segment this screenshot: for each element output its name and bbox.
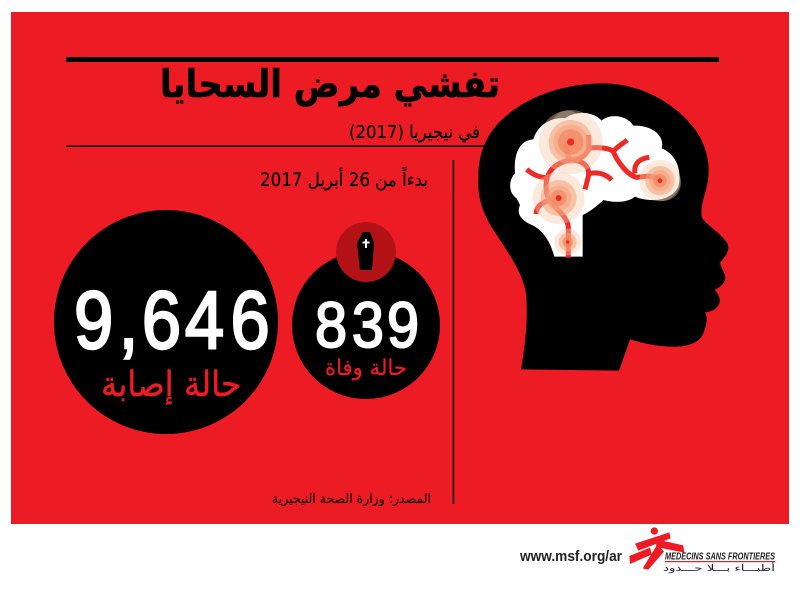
cases label: حالة إصابة: [101, 365, 241, 405]
header divider: [66, 146, 496, 147]
inflammation spot: top: [539, 110, 603, 174]
deaths number: 839: [315, 289, 419, 361]
deaths label: حالة وفاة: [325, 356, 407, 381]
icon: coffin badge: [336, 222, 396, 282]
footer website: www.msf.org/ar: [519, 549, 622, 565]
date line: بدءاً من 26 أبريل 2017: [260, 166, 428, 191]
logo arabic name: أطبـــاء بـــلا حـــدود: [663, 562, 775, 574]
cases number: 9,646: [74, 275, 270, 366]
inflammation spot: right: [639, 160, 681, 201]
inflammation spot: middle: [533, 172, 585, 224]
brain shape: [510, 113, 679, 257]
logo underline: [665, 561, 775, 562]
brain halo shadows: [551, 111, 681, 201]
inflammation spot: brain stem: [554, 229, 581, 255]
stat: cases circle: [54, 210, 278, 434]
top heavy rule: [66, 57, 719, 62]
subtitle: في نيجيريا (2017): [349, 122, 480, 143]
vertical divider: [453, 160, 454, 504]
head and brain illustration: [478, 83, 728, 371]
MSF logo: [629, 527, 775, 574]
icon: running figure: [629, 527, 684, 570]
stat: deaths circle: [292, 251, 440, 399]
title: تفشي مرض السحايا: [160, 62, 500, 106]
head silhouette: [478, 83, 728, 371]
source note: المصدر: وزارة الصحة النيجيرية: [272, 492, 431, 507]
blood vessels: [527, 135, 660, 258]
